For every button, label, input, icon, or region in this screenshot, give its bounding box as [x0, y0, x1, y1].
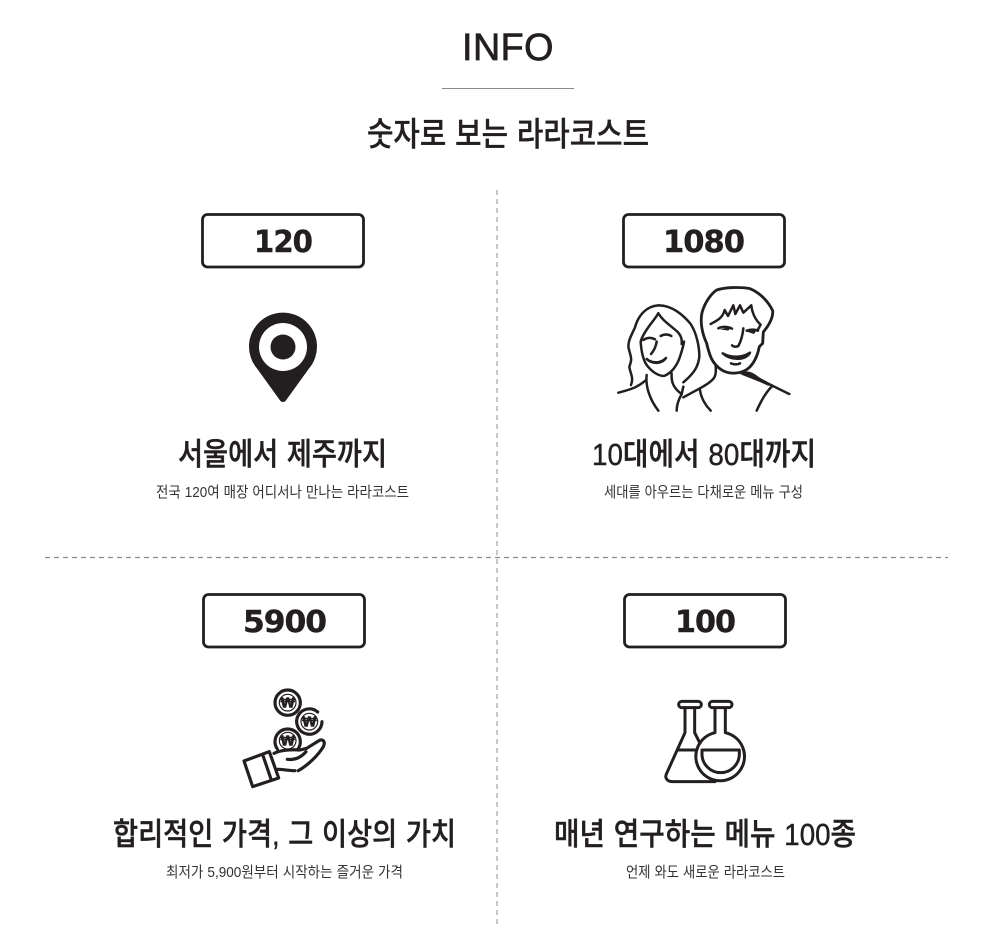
icon: hand with won coins	[244, 690, 324, 787]
panel heading: 서울에서 제주까지	[178, 437, 387, 472]
number badge: 5900: 5900	[243, 605, 326, 640]
number badge: 5900	[204, 594, 364, 647]
number badge: 100	[624, 594, 786, 647]
icon: map pin	[249, 313, 317, 402]
icon: hand with won coins: ₩	[302, 716, 317, 731]
panel: 1080 menu	[592, 214, 816, 501]
number badge: 1080: 1080	[663, 225, 744, 260]
panel: 120 stores	[156, 214, 409, 501]
panel heading: 10대에서 80대까지	[592, 437, 816, 472]
icon: hand with won coins: ₩	[280, 735, 295, 750]
number badge: 120: 120	[254, 225, 312, 260]
icon: hand with won coins: ₩	[280, 697, 295, 712]
icon: lab flasks	[666, 701, 744, 782]
panel description: 전국 120여 매장 어디서나 만나는 라라코스트	[156, 484, 409, 501]
panel: 100 new menus	[554, 594, 856, 881]
panel description: 언제 와도 새로운 라라코스트	[626, 864, 785, 881]
panel heading: 매년 연구하는 메뉴 100종	[554, 817, 856, 852]
panel heading: 합리적인 가격, 그 이상의 가치	[113, 817, 456, 852]
number badge: 100: 100	[675, 605, 735, 640]
panel description: 최저가 5,900원부터 시작하는 즐거운 가격	[166, 864, 403, 881]
heading: INFO: INFO	[462, 27, 554, 69]
panel: 5900 price	[113, 594, 456, 881]
icon: two people	[618, 288, 789, 411]
number badge: 1080	[624, 214, 784, 267]
title: 숫자로 보는 라라코스트	[367, 116, 649, 152]
number badge: 120	[202, 214, 364, 267]
panel description: 세대를 아우르는 다채로운 메뉴 구성	[604, 484, 803, 501]
